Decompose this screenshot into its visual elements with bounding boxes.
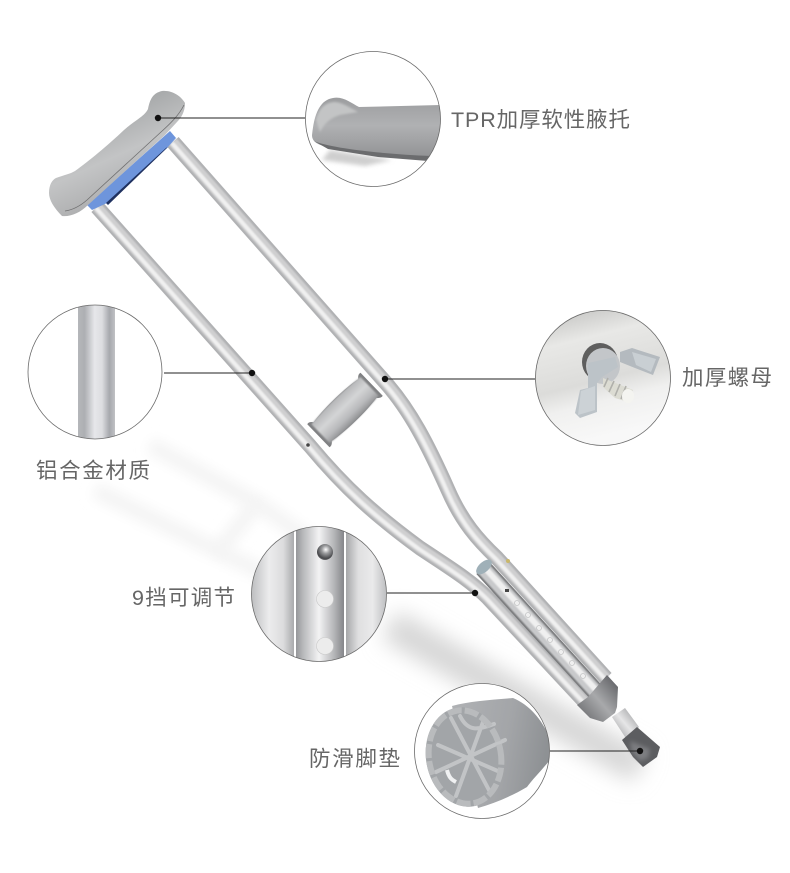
bolt left <box>306 443 310 447</box>
blue underarm bracket <box>87 131 176 210</box>
crutch product illustration <box>49 91 660 767</box>
inset: underarm pad detail <box>305 51 442 187</box>
rivet <box>317 544 333 560</box>
label: thick nut: 加厚螺母 <box>682 366 772 390</box>
ground shadow of crutch <box>95 445 640 768</box>
underarm pad <box>49 91 185 216</box>
hand grip <box>307 373 383 447</box>
wing nut <box>575 343 660 418</box>
inset: wing nut detail <box>535 310 671 446</box>
label: 9 position adjustment: 9挡可调节 <box>132 586 235 610</box>
leader lines and dots <box>155 115 643 754</box>
adjustment holes <box>316 590 334 608</box>
inset: adjustable holes detail <box>251 526 387 662</box>
lower rod <box>612 708 639 740</box>
right tube <box>172 142 606 679</box>
left tube <box>96 207 585 703</box>
label: non-slip foot pad: 防滑脚垫 <box>309 747 400 771</box>
inset: rubber foot detail <box>414 683 552 819</box>
label: aluminium alloy: 铝合金材质 <box>36 459 150 483</box>
telescoping inner tube <box>474 557 597 692</box>
label: TPR pad: TPR加厚软性腋托 <box>451 108 630 132</box>
inset: aluminium tube detail <box>28 300 162 445</box>
rubber foot tip <box>622 727 660 767</box>
lower collar <box>577 675 618 722</box>
